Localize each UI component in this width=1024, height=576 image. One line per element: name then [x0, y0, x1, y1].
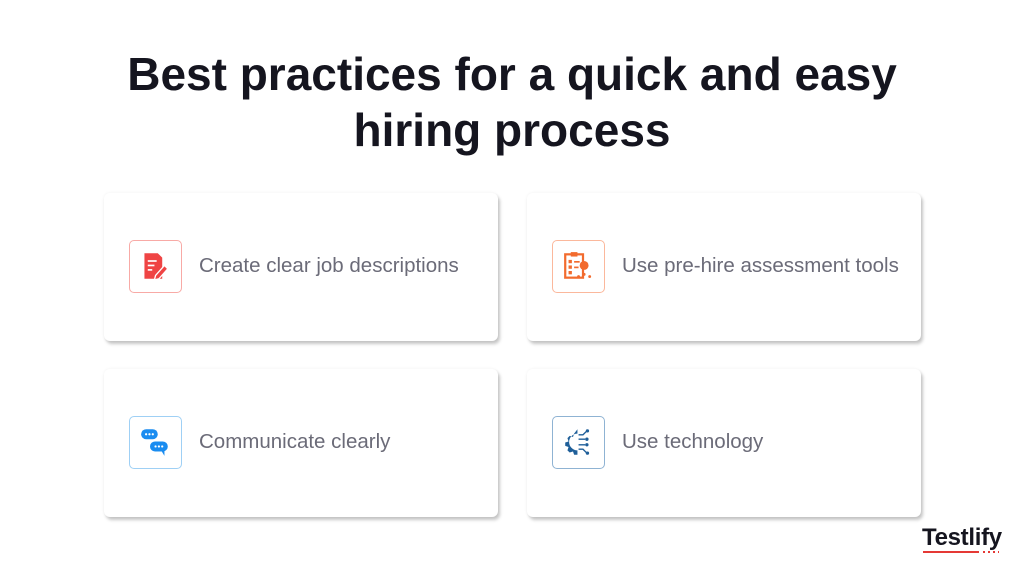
logo: Testlify: Testlify [922, 524, 1002, 551]
icon: chat bubbles [129, 416, 182, 469]
card: create clear job descriptions [104, 193, 498, 341]
text: Use technology [622, 430, 763, 453]
title [127, 48, 897, 156]
text: Communicate clearly [199, 430, 390, 453]
icon: document with pencil [129, 240, 182, 293]
card: use technology [527, 369, 921, 517]
text: Create clear job descriptions [199, 254, 459, 277]
card: pre-hire assessment [527, 193, 921, 341]
icon: gear circuit [552, 416, 605, 469]
text: Use pre-hire assessment tools [622, 254, 899, 277]
title: Best practices for a quick and easy [127, 48, 897, 100]
card: communicate clearly [104, 369, 498, 517]
title: hiring process [354, 104, 670, 156]
icon: clipboard assessment [552, 240, 605, 293]
